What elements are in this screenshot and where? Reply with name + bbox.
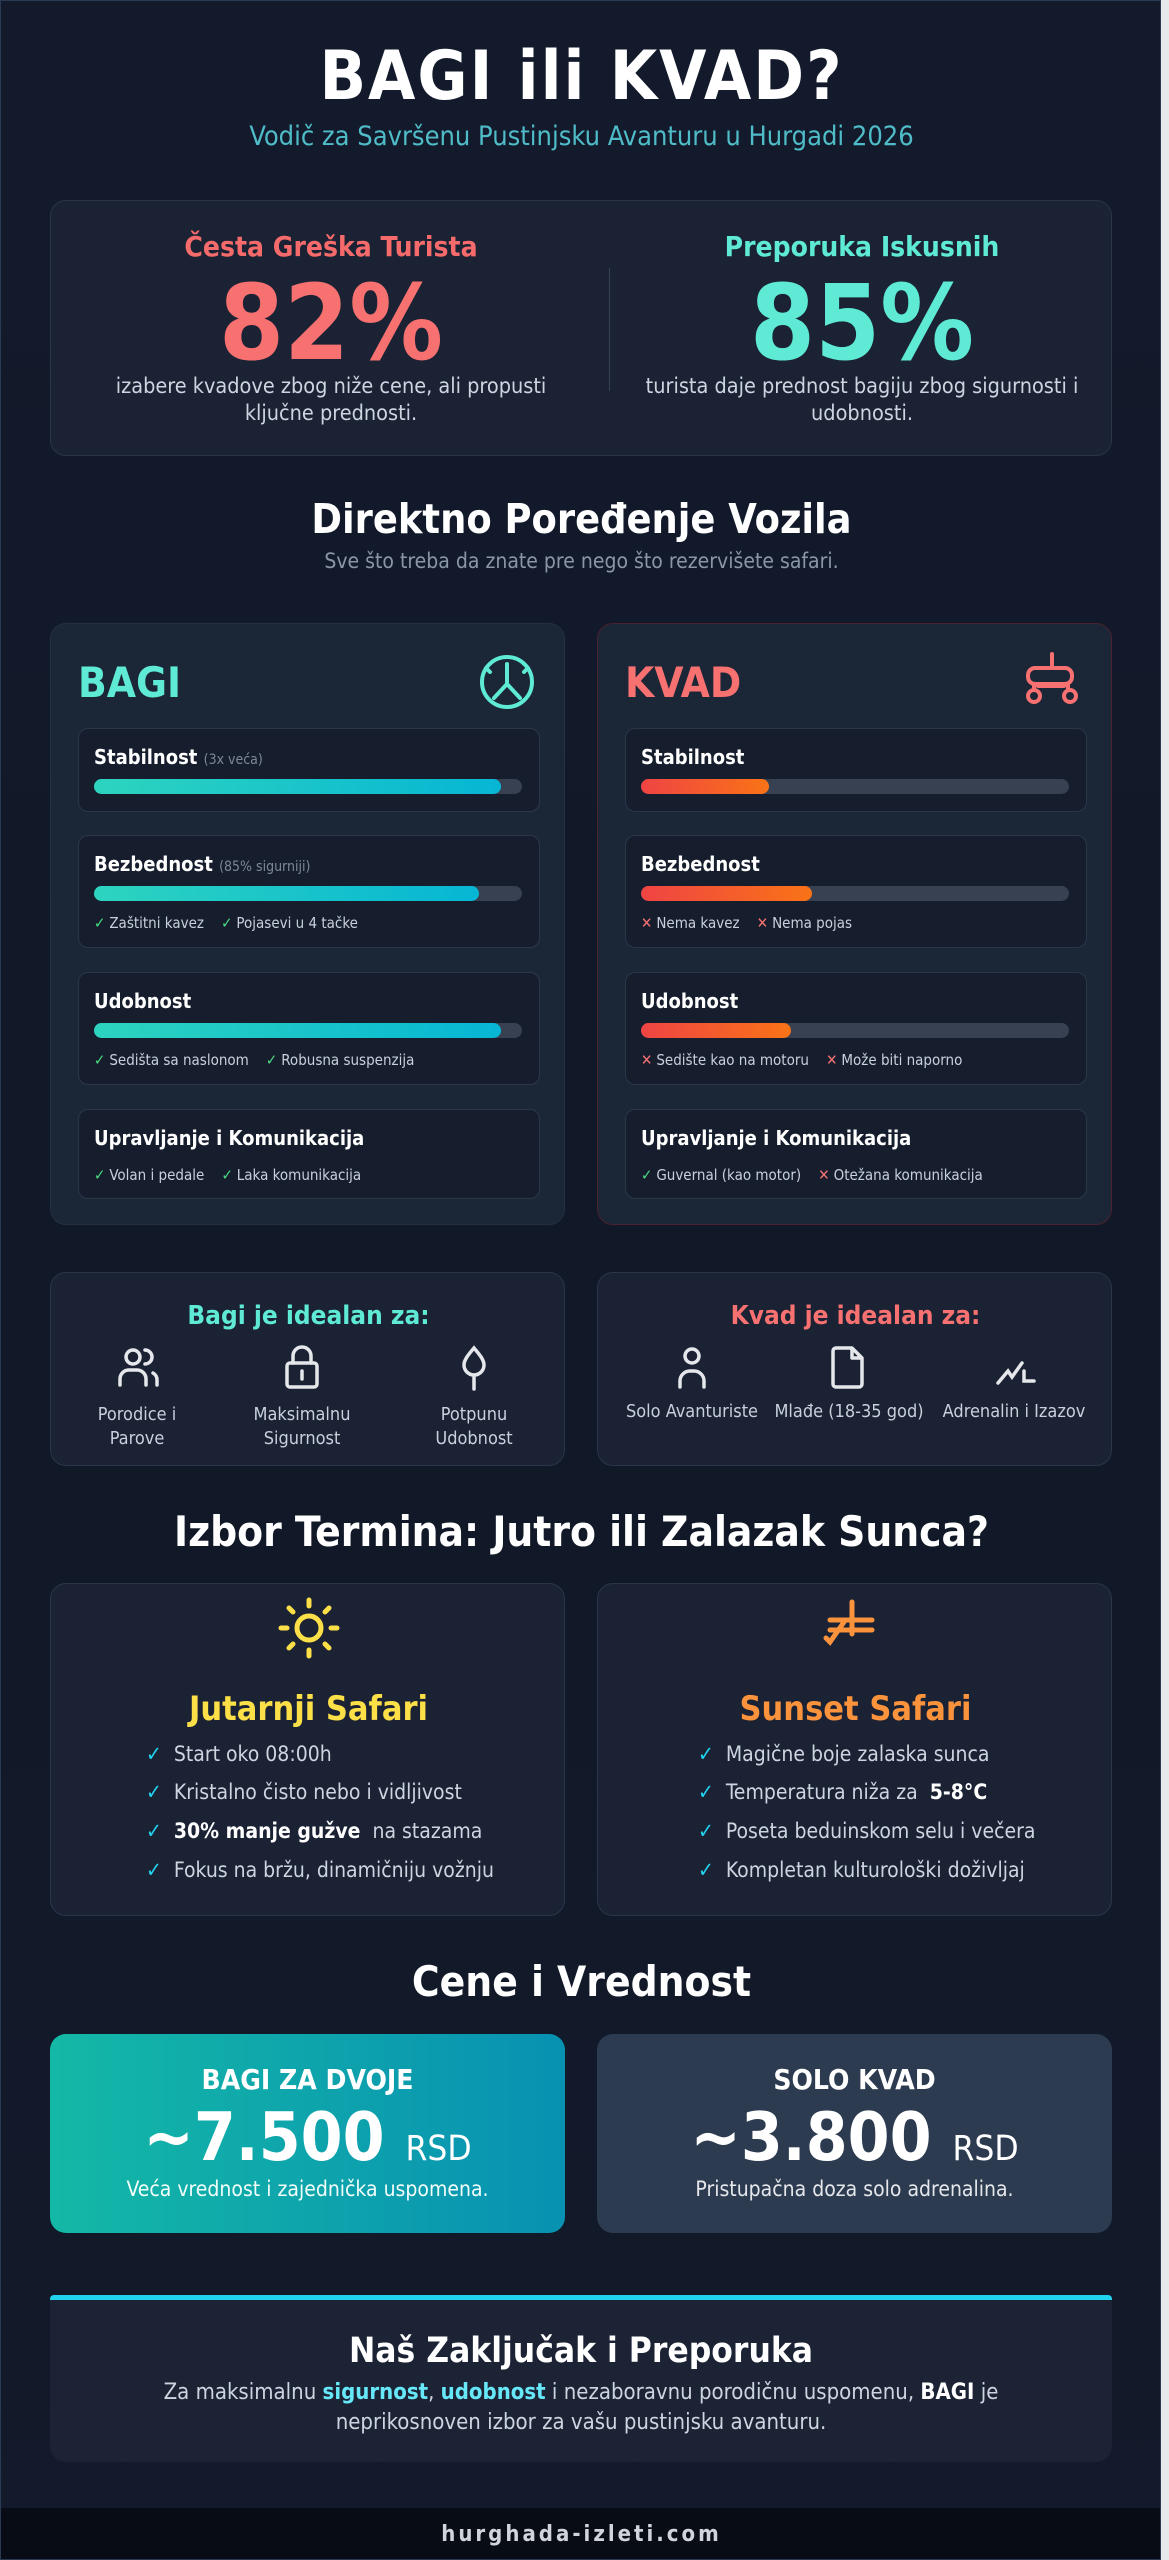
card: control [625, 1109, 1087, 1199]
price card: kvad: ~3.800 RSD [690, 2098, 1019, 2176]
card: comfort [78, 972, 540, 1085]
title: BAGI ili KVAD? [319, 37, 844, 116]
price card: bagi: BAGI ZA DVOJE [202, 2063, 413, 2096]
card: comfort: Udobnost [641, 989, 738, 1013]
stat: common mistake: izabere kvadove zbog niže cene, ali propusti ključne prednosti. [116, 374, 546, 426]
price card: kvad [597, 2034, 1112, 2233]
icon: solo person: Solo Avanturiste [626, 1401, 758, 1422]
card: control: ✓ Volan i pedale ✓ Laka komunikacija [94, 1166, 361, 1184]
list: sunset: ✓ Magične boje zalaska sunca [698, 1742, 989, 1766]
stat: expert recommendation: Preporuka Iskusnih [725, 230, 999, 263]
card: stability: Stabilnost [641, 745, 744, 769]
heading: morning: Jutarnji Safari [189, 1689, 428, 1729]
stat: common mistake: 82% [219, 262, 443, 384]
panel: conclusion [50, 2295, 1112, 2462]
icon: family: Porodice i Parove [98, 1404, 176, 1449]
subtitle: Vodič za Savršenu Pustinjsku Avanturu u Hurgadi 2026 [249, 121, 914, 152]
card: stability [78, 728, 540, 812]
price card: kvad: SOLO KVAD [773, 2063, 936, 2096]
icon: family [98, 1348, 176, 1449]
panel: KVAD [597, 623, 1112, 1225]
card: safety: Bezbednost [641, 852, 760, 876]
list: morning: ✓ 30% manje gužve na stazama [146, 1819, 482, 1843]
icon: quad [1026, 652, 1078, 704]
price card: bagi: ~7.500 RSD [143, 2098, 472, 2176]
icon: sun [278, 1598, 340, 1658]
panel: kvad ideal for [597, 1272, 1112, 1466]
icon: sunset [824, 1600, 874, 1646]
panel: morning safari [50, 1583, 565, 1916]
card: comfort [625, 972, 1087, 1085]
price card: bagi: Veća vrednost i zajednička uspomena. [126, 2177, 489, 2201]
list: sunset: ✓ Poseta beduinskom selu i večera [698, 1819, 1035, 1843]
card: comfort: ✕ Sedište kao na motoru ✕ Može biti naporno [641, 1051, 962, 1069]
card: control [78, 1109, 540, 1199]
panel: kvad ideal for: Kvad je idealan za: [731, 1301, 980, 1331]
icon: leaf [435, 1345, 513, 1449]
card: control: Upravljanje i Komunikacija [94, 1126, 364, 1150]
stat: common mistake [116, 230, 546, 426]
icon: document [774, 1346, 924, 1422]
stat: expert recommendation [646, 230, 1078, 426]
panel: bagi ideal for: Bagi je idealan za: [187, 1301, 430, 1331]
list: morning: ✓ Fokus na bržu, dinamičniju vožnju [146, 1858, 494, 1882]
card: safety: ✓ Zaštitni kavez ✓ Pojasevi u 4 tačke [94, 914, 358, 932]
heading: time selection: Izbor Termina: Jutro ili Zalazak Sunca? [174, 1507, 989, 1556]
icon: zigzag [942, 1361, 1085, 1422]
list: morning [146, 1742, 494, 1882]
card: safety: ✕ Nema kavez ✕ Nema pojas [641, 914, 852, 932]
icon: lock [254, 1345, 350, 1449]
heading: BAGI: BAGI [78, 658, 181, 707]
heading: comparison: Direktno Poređenje Vozila [311, 495, 852, 543]
card: safety: Bezbednost (85% sigurniji) [94, 852, 310, 876]
card: stability [625, 728, 1087, 812]
icon: steering wheel [480, 655, 534, 709]
panel: bagi ideal for [50, 1272, 565, 1466]
heading: prices: Cene i Vrednost [412, 1957, 751, 2006]
list: morning: ✓ Start oko 08:00h [146, 1742, 332, 1766]
heading: sunset: Sunset Safari [740, 1689, 972, 1729]
list: sunset: ✓ Kompletan kulturološki doživljaj [698, 1858, 1025, 1882]
panel: stats [50, 200, 1112, 456]
panel: BAGI [50, 623, 565, 1225]
price card: bagi [50, 2034, 565, 2233]
icon: lock: Maksimalnu Sigurnost [254, 1404, 350, 1449]
subheading: Sve što treba da znate pre nego što rezervišete safari. [324, 549, 839, 573]
card: comfort: Udobnost [94, 989, 191, 1013]
panel: conclusion: Naš Zaključak i Preporuka [349, 2331, 813, 2371]
icon: zigzag: Adrenalin i Izazov [943, 1401, 1085, 1422]
icon: solo person [626, 1347, 758, 1422]
card: control: ✓ Guvernal (kao motor) ✕ Otežana komunikacija [641, 1166, 983, 1184]
icon: document: Mlađe (18-35 god) [774, 1401, 924, 1422]
card: safety [78, 835, 540, 948]
icon: leaf: Potpunu Udobnost [435, 1404, 513, 1449]
stat: expert recommendation: turista daje prednost bagiju zbog sigurnosti i udobnosti. [646, 374, 1078, 426]
footer [1, 2508, 1162, 2560]
stat: common mistake: Česta Greška Turista [184, 230, 478, 263]
list: sunset: ✓ Temperatura niža za 5-8°C [698, 1780, 987, 1804]
heading: KVAD: KVAD [625, 658, 741, 707]
card: control: Upravljanje i Komunikacija [641, 1126, 911, 1150]
list: morning: ✓ Kristalno čisto nebo i vidljivost [146, 1780, 462, 1804]
price card: kvad: Pristupačna doza solo adrenalina. [695, 2177, 1014, 2201]
card: stability: Stabilnost (3x veća) [94, 745, 263, 769]
card: comfort: ✓ Sedišta sa naslonom ✓ Robusna suspenzija [94, 1051, 414, 1069]
panel: conclusion: Za maksimalnu sigurnost, udobnost i nezaboravnu porodičnu uspomenu, BAGI je neprikosnoven izbor za vašu pustinjsku avanturu. [164, 2380, 998, 2435]
list: sunset [698, 1742, 1035, 1882]
footer: hurghada-izleti.com [441, 2522, 722, 2547]
stat: expert recommendation: 85% [750, 262, 974, 384]
card: safety [625, 835, 1087, 948]
panel: sunset safari [597, 1583, 1112, 1916]
